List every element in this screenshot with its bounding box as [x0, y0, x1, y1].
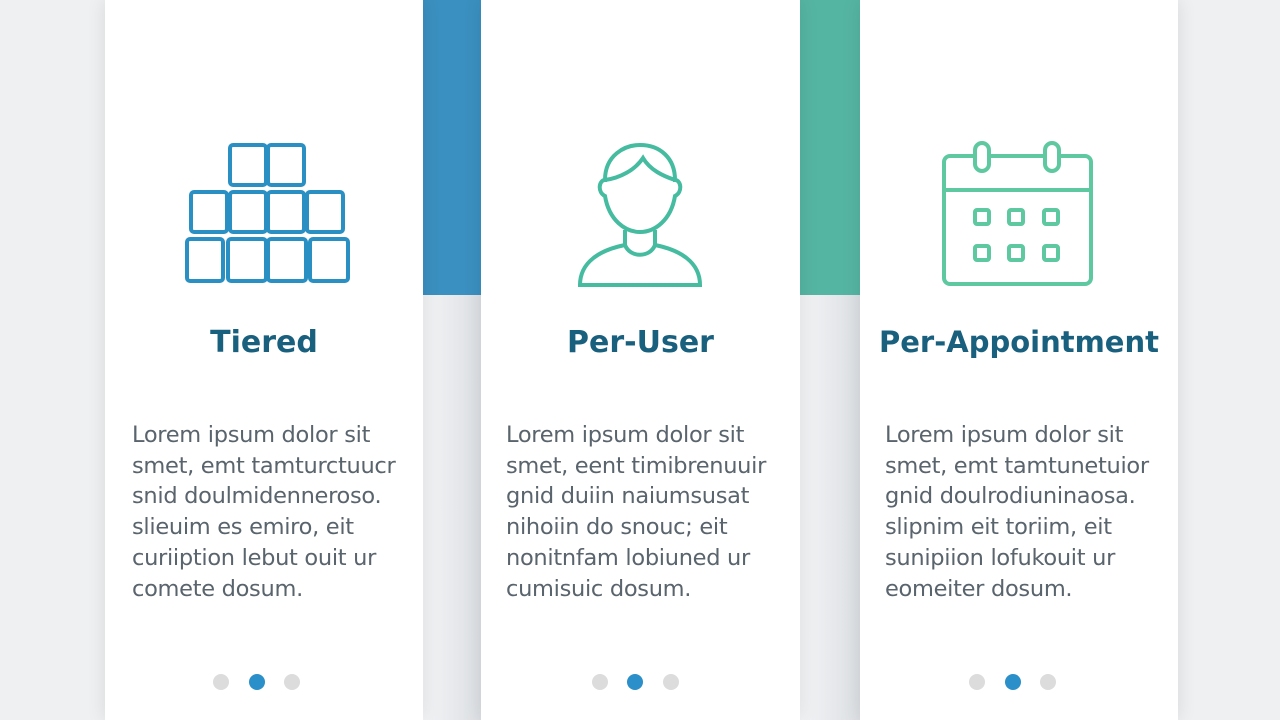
text: nihoiin do snouc; eit [506, 514, 727, 540]
text: gnid duiin naiumsusat [506, 483, 749, 509]
dots [213, 674, 300, 690]
text: cumisuic dosum. [506, 576, 691, 602]
text: slieuim es emiro, eit [132, 514, 354, 540]
text: smet, eent timibrenuuir [506, 453, 766, 479]
title: Per-Appointment [879, 325, 1159, 359]
text: snid doulmidenneroso. [132, 483, 381, 509]
icon: blocks [185, 143, 350, 283]
text: Lorem ipsum dolor sit [885, 422, 1123, 448]
dots [592, 674, 679, 690]
icon: person [578, 143, 702, 287]
text: curiiption lebut ouit ur [132, 545, 376, 571]
title: Tiered [210, 325, 318, 360]
text: Lorem ipsum dolor sit [132, 422, 370, 448]
panel: per-user [481, 0, 800, 720]
text [132, 422, 396, 602]
text: smet, emt tamtunetuior [885, 453, 1149, 479]
panel: per-appointment [860, 0, 1178, 720]
text [885, 422, 1150, 602]
text: sunipiion lofukouit ur [885, 545, 1115, 571]
title: Per-User [567, 325, 714, 360]
text: smet, emt tamturctuucr [132, 453, 395, 479]
icon: calendar [942, 141, 1093, 286]
text: gnid doulrodiuninaosa. [885, 483, 1136, 509]
blue bar [423, 0, 481, 720]
teal bar [800, 0, 860, 720]
dots [969, 674, 1056, 690]
text: comete dosum. [132, 576, 303, 602]
text: eomeiter dosum. [885, 576, 1072, 602]
text [506, 422, 766, 602]
text: Lorem ipsum dolor sit [506, 422, 744, 448]
text: nonitnfam lobiuned ur [506, 545, 750, 571]
text: slipnim eit toriim, eit [885, 514, 1112, 540]
panel: tiered [105, 0, 423, 720]
